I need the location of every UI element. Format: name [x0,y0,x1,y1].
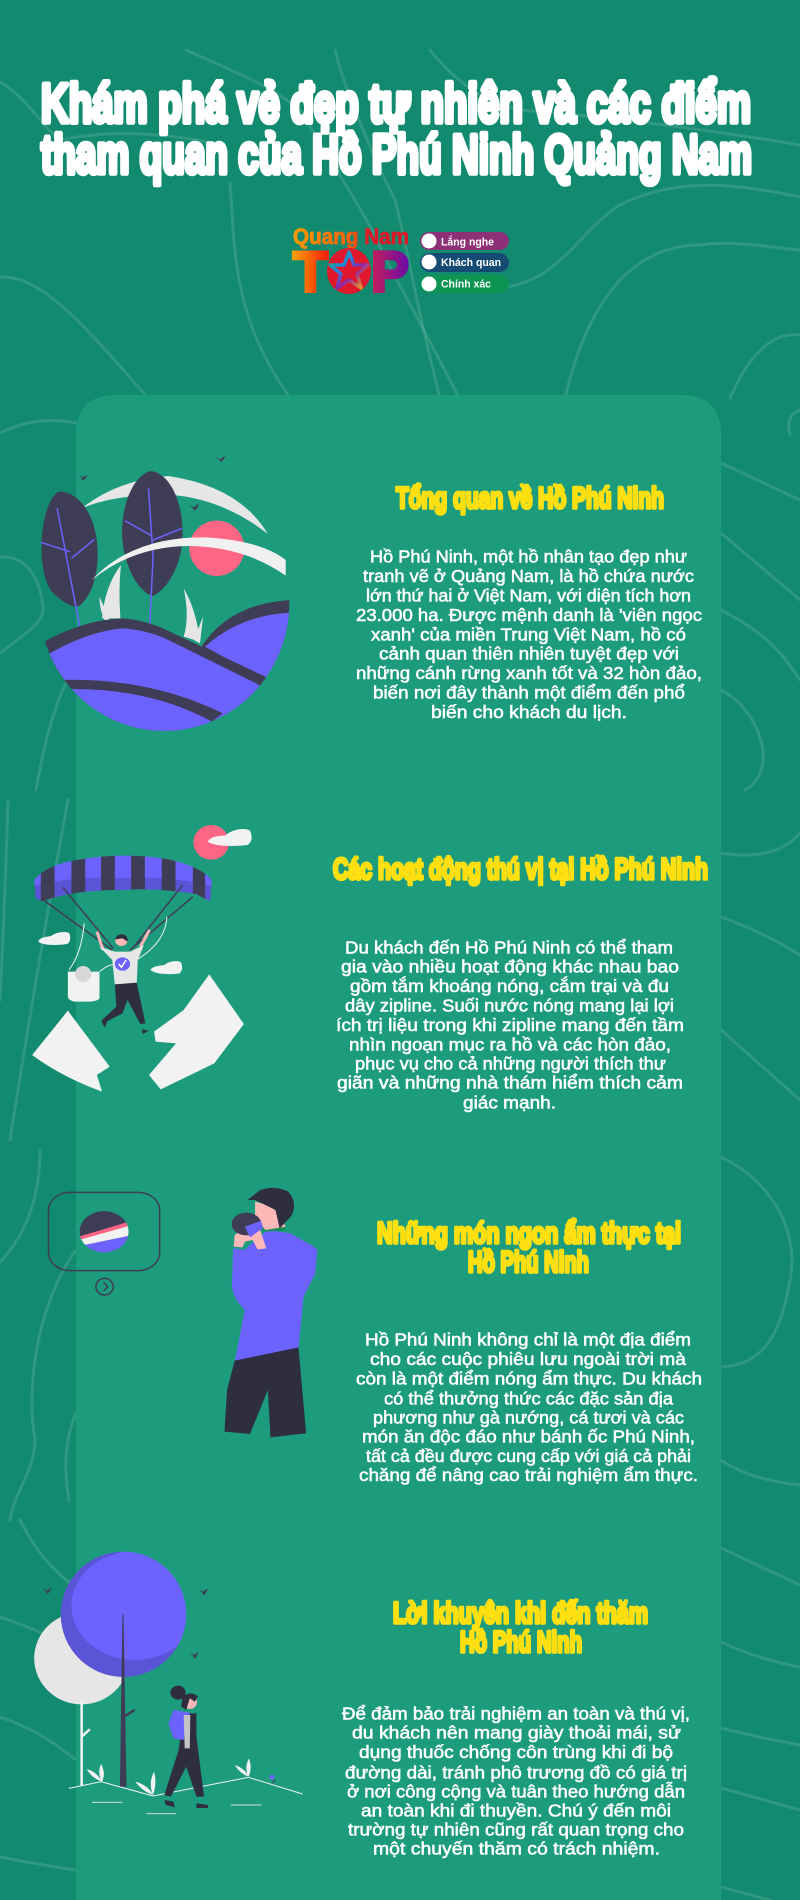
body text: Để đảm bảo trải nghiệm an toàn và thú vị, [342,1703,690,1723]
pill: Chính xác: Chính xác [441,278,491,290]
body text: có thể thưởng thức các đặc sản địa [384,1388,673,1408]
body text: cho các cuộc phiêu lưu ngoài trời mà [370,1349,686,1369]
pill: Lắng nghe [420,232,509,250]
body text: tất cả đều được cung cấp với giá cả phải [366,1446,691,1466]
illustration: trees and hiker [34,1551,303,1814]
illustration: paraglider [31,825,252,1092]
heading: Tổng quan về Hồ Phú Ninh [396,482,664,515]
illustration: person eating [224,1188,317,1437]
body text: Du khách đến Hồ Phú Ninh có thể tham [345,937,673,957]
body text: phục vụ cho cả những người thích thư [355,1054,666,1074]
body text: nhìn ngoạn mục ra hồ và các hòn đảo, [349,1034,671,1054]
body text: dụng thuốc chống côn trùng khi đi bộ [359,1742,673,1762]
section: cuisine [48,1188,702,1485]
body text: phương như gà nướng, cá tươi và các [373,1408,684,1428]
logo [293,224,509,304]
body text: biến cho khách du lịch. [431,702,627,722]
body text: gồm tắm khoáng nóng, cắm trại và đu [350,975,669,996]
section: activities [31,825,708,1112]
body text [336,937,684,1112]
body text: chăng để nâng cao trải nghiệm ẩm thực. [359,1465,698,1485]
heading: Hồ Phú Ninh [468,1246,589,1279]
logo wordmark: Quang Nam [293,224,409,249]
body text: còn là một điểm nóng ẩm thực. Du khách [356,1368,702,1388]
body text: Hồ Phú Ninh, một hồ nhân tạo đẹp như [370,547,687,567]
body text: những cánh rừng xanh tốt và 32 hòn đảo, [356,663,702,683]
section: overview [31,455,702,757]
body text: dây zipline. Suối nước nóng mang lại lợi [345,996,674,1016]
heading [393,1597,648,1659]
body text [356,1330,702,1485]
body text: biến nơi đây thành một điểm đến phổ [373,682,685,702]
body text: trường tự nhiên cũng rất quan trọng cho [348,1820,684,1840]
illustration: landscape with leaves [40,455,290,731]
body text: 23.000 ha. Được mệnh danh là 'viên ngọc [356,605,702,625]
illustration: burger card [48,1192,160,1295]
logo star badge [327,248,371,294]
body text: xanh' của miền Trung Việt Nam, hồ có [371,624,686,644]
body text: cảnh quan thiên nhiên tuyệt đẹp với [379,644,679,664]
body text: du khách nên mang giày thoải mái, sử [352,1723,681,1743]
pill: Khách quan: Khách quan [441,257,501,269]
body text: giác mạnh. [463,1092,556,1112]
pill: Lắng nghe: Lắng nghe [441,236,494,248]
body text: gia vào nhiều hoạt động khác nhau bao [341,957,679,977]
body text: tranh vẽ ở Quảng Nam, là hồ chứa nước [363,566,694,586]
heading: Hồ Phú Ninh [460,1626,582,1659]
body text [356,547,702,722]
body text [342,1703,690,1859]
main panel [76,395,721,1900]
body text: ích trị liệu trong khi zipline mang đến tầm [336,1015,684,1035]
body text: giãn và những nhà thám hiểm thích cảm [337,1073,683,1093]
body text: đường dài, tránh phô trương đồ có giá trị [345,1762,687,1782]
body text: ở nơi công cộng và tuân theo hướng dẫn [347,1781,685,1802]
body text: Hồ Phú Ninh không chỉ là một địa điểm [365,1330,691,1350]
heading: Lời khuyên khi đến thăm [393,1597,648,1630]
heading: Những món ngon ẩm thực tại [377,1217,681,1250]
body text: một chuyến thăm có trách nhiệm. [373,1839,660,1859]
title [41,72,752,185]
heading [377,1217,681,1279]
body text: lớn thứ hai ở Việt Nam, với diện tích hơn [366,585,691,605]
logo TOP: TOP [293,240,409,304]
pill: Khách quan [420,253,509,272]
body text: món ăn độc đáo như bánh ốc Phú Ninh, [362,1427,695,1447]
section: tips [34,1551,690,1859]
pill: Chính xác [420,275,509,293]
body text: an toàn khi đi thuyền. Chú ý đến môi [361,1800,671,1820]
